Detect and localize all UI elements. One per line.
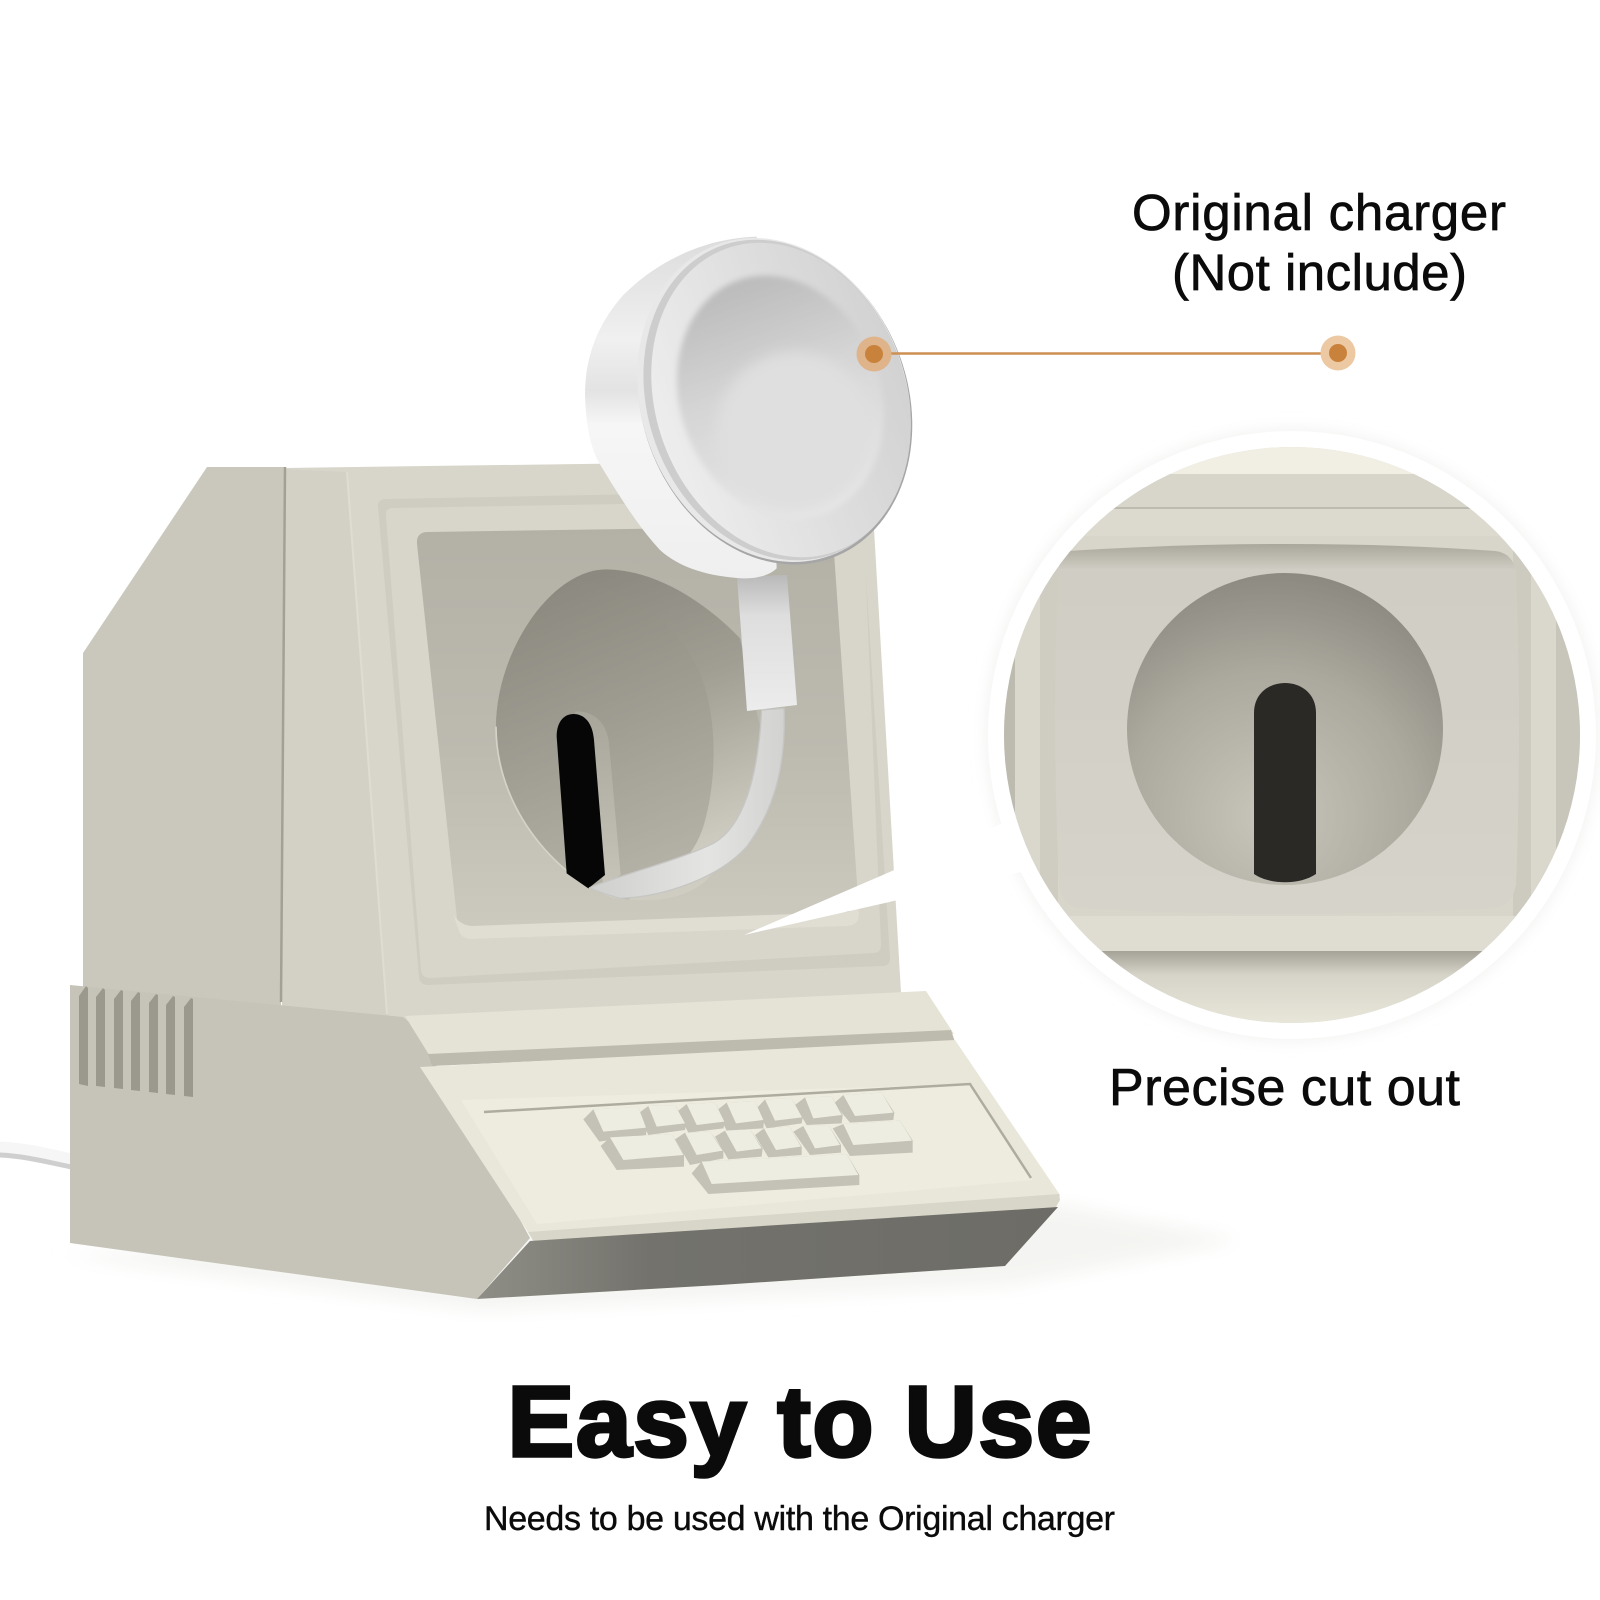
original charger puck [585,199,957,603]
zoomed hole [1127,573,1443,885]
keyboard keys [583,1093,913,1194]
screen recess [417,526,859,939]
recess outer wall [496,569,760,900]
puck concave centre [644,246,916,548]
charging cable [590,708,784,898]
screen bezel [386,500,881,978]
keyboard panel [461,1084,1033,1224]
ledge groove [428,1030,955,1066]
label: original charger: (Not include) [1172,244,1467,301]
right columns [1513,536,1531,936]
puck inner disc [717,352,873,512]
magnifier shadow [989,432,1595,1038]
retro computer stand [70,460,1060,1299]
recess lower highlight [450,895,859,939]
front lip [528,1194,1060,1243]
subtitle: Needs to be used with the Original charger [484,1500,1115,1538]
charger recess [480,569,760,903]
slot opening [557,714,605,888]
label: original charger [1132,184,1506,301]
base underside [477,1207,1058,1299]
screen frame [378,490,890,985]
vent slots [79,986,193,1097]
ground shadow [60,1205,1240,1310]
puck rim shadow [593,201,957,603]
puck body [585,237,777,578]
monitor front face [282,460,902,1040]
base side face [70,985,530,1299]
slot wall [575,712,621,885]
puck ridge [600,202,954,598]
cable connector [737,575,797,711]
lower cap [1102,951,1482,1023]
zoomed slot [1254,683,1316,882]
title: Easy to Use [508,1366,1092,1478]
recess back wall [496,608,714,900]
magnifier ring [988,431,1596,1039]
recess rim highlight [496,727,620,898]
callout line to charger [856,336,1356,372]
monitor side face [83,467,285,1020]
label: precise cut out: Precise cut out [1109,1059,1461,1117]
left columns [1004,656,1015,814]
base top ledge [405,991,954,1058]
recess frame below [1070,916,1516,951]
dot on charger [856,336,892,372]
power cable [0,1147,72,1162]
dot at label [1320,336,1356,370]
puck face [608,206,954,594]
puck rim [593,199,955,601]
label: original charger: Original charger [1132,184,1506,241]
keyboard slope [420,1040,1060,1241]
monitor side strip [281,467,389,1030]
screen recess zoomed [1055,544,1519,914]
magnifier detail view [1000,440,1590,1031]
magnifier pointer [744,823,1030,935]
top cap [1171,447,1413,474]
